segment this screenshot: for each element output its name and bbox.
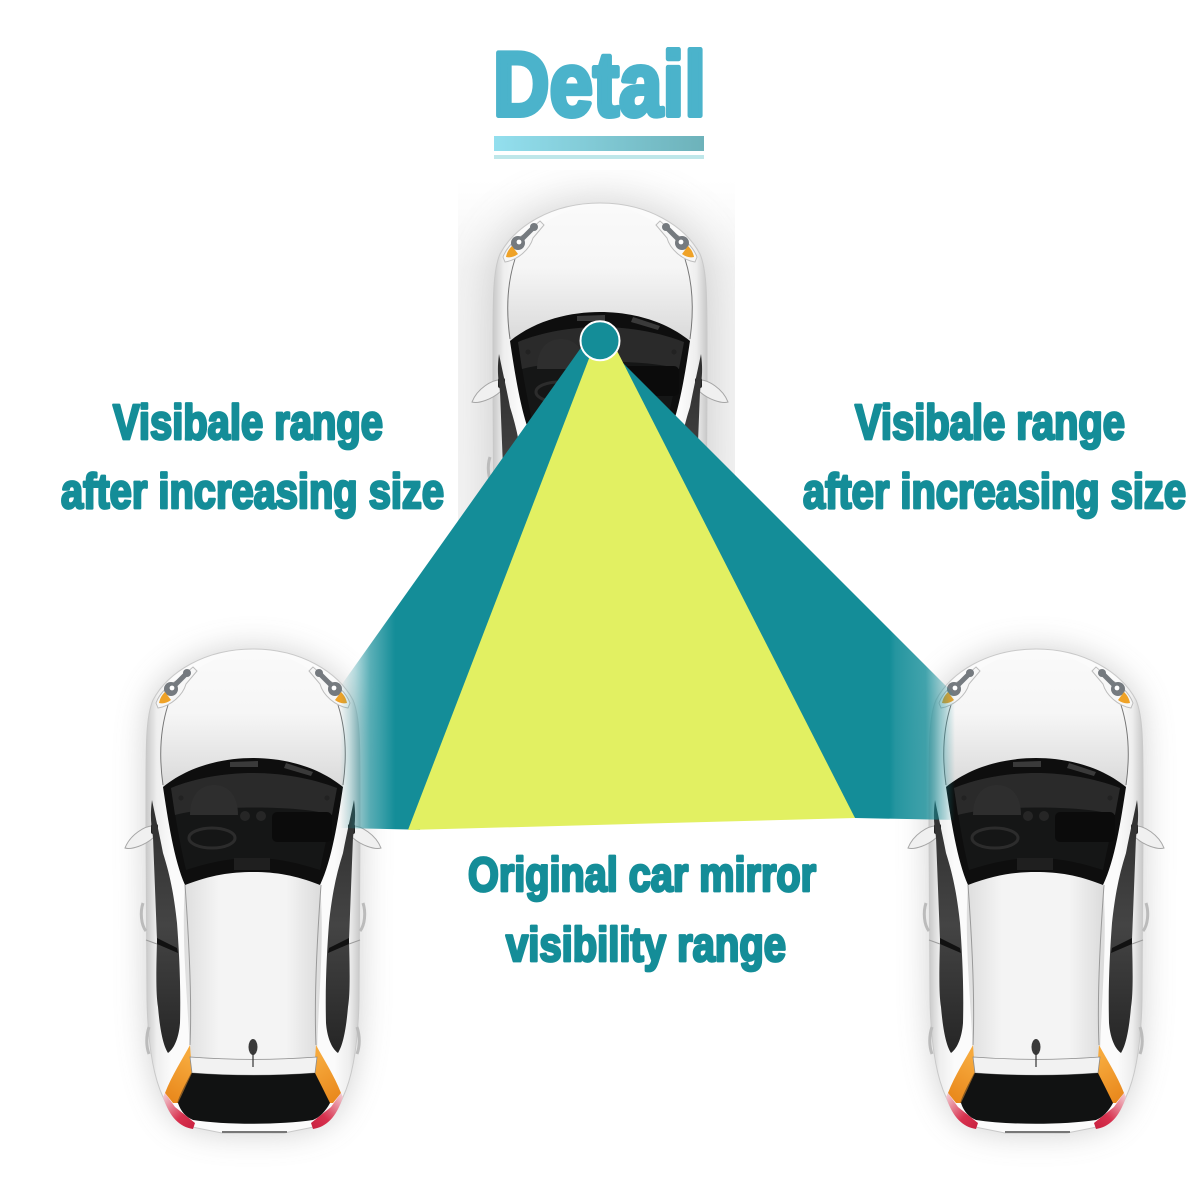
label: right visible range — [803, 396, 1186, 519]
label: left visible range: Visibale range — [113, 396, 383, 450]
label: right visible range: Visibale range — [855, 396, 1125, 450]
title: Detail — [493, 34, 706, 136]
label: original visibility range: Original car mirror — [468, 849, 816, 902]
label: left visible range: after increasing size — [61, 465, 444, 519]
viewpoint marker — [580, 321, 620, 360]
label: left visible range — [61, 396, 444, 519]
extended view zone: right teal wedge — [600, 340, 955, 820]
original view zone: yellow triangle — [408, 335, 855, 830]
title underline — [494, 136, 704, 159]
car: bottom left — [125, 649, 381, 1133]
car: bottom right — [908, 649, 1164, 1133]
label: original visibility range — [468, 849, 816, 972]
car: top, behind the viewer — [458, 181, 735, 520]
label: original visibility range: visibility range — [506, 919, 786, 972]
extended view zone: left teal wedge — [340, 335, 605, 830]
